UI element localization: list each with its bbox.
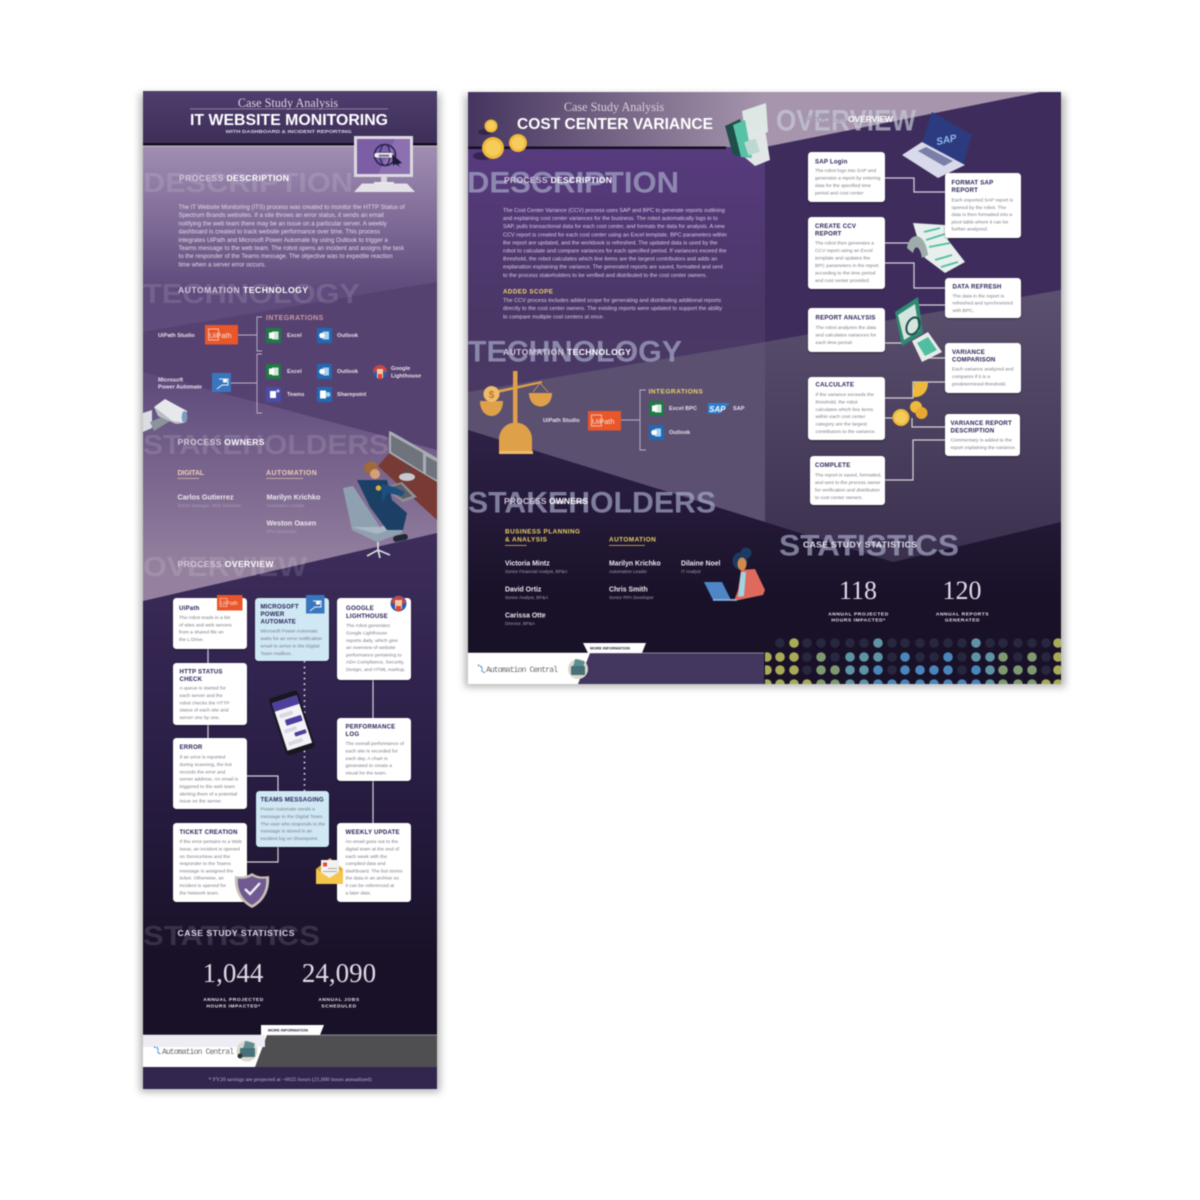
heading: process description: PROCESS DESCRIPTION — [504, 175, 612, 185]
diagram: integrations: UiPath Studio — [158, 333, 195, 339]
card: Performance log: each site is recorded for — [346, 748, 398, 754]
icon: Outlook — [317, 328, 332, 343]
team: business planning and analysis: Director, BP&A — [505, 621, 535, 626]
logo: Automation Central: Automation Central — [486, 666, 558, 675]
card: Error — [173, 738, 247, 809]
text block: description: Teams message to the web team. The robot opens an incident and assigns the task — [178, 245, 405, 252]
team: automation: IT Analyst — [681, 569, 701, 574]
card: Format SAP report: data is then formatted into a — [952, 212, 1012, 218]
statistic: reports generated — [936, 576, 989, 624]
card: Variance report description: VARIANCE REPORT — [950, 420, 1012, 427]
team: digital: Carlos Gutierrez — [178, 492, 234, 502]
card: HTTP status check: CHECK — [180, 676, 203, 683]
card: Google Lighthouse: Google Lighthouse — [346, 630, 387, 636]
card: SAP Login: The robot logs into SAP and — [815, 168, 876, 174]
heading: automation technology: TECHNOLOGY — [143, 278, 360, 309]
team: business planning and analysis — [505, 528, 580, 626]
diagram: integrations: INTEGRATIONS — [648, 388, 703, 396]
card: Ticket creation: message is assigned the — [180, 868, 234, 874]
text block: description: The IT Website Monitoring (ITS) process was created to monitor the HTTP Status of — [178, 204, 405, 211]
heading: case study statistics: STATISTICS — [779, 530, 959, 562]
statistic: reports generated: GENERATED — [945, 618, 980, 624]
text block: description: Spectrum Brands websites. If a site throws an error status, it sends an email — [178, 212, 384, 219]
card: Calculate: calculates which line items — [816, 407, 874, 413]
footer — [468, 643, 764, 684]
heading: process description: PROCESS DESCRIPTION — [179, 173, 289, 183]
icon: UiPath — [588, 411, 621, 430]
card: Ticket creation: TICKET CREATION — [180, 829, 238, 836]
card: HTTP status check — [173, 663, 247, 725]
diagram: integrations: Sharepoint — [337, 392, 366, 398]
icon: Excel — [266, 328, 281, 343]
card: Performance log: PERFORMANCE — [346, 724, 395, 730]
card: HTTP status check: server one by one. — [180, 715, 220, 721]
card: SAP Login: SAP Login — [815, 158, 848, 166]
text block: description: to the process stakeholders to be verified and distributed to the cost center owners. — [503, 273, 708, 279]
team: business planning and analysis: Senior Analyst, BP&A — [505, 595, 548, 600]
card: Error: If an error is reported — [180, 754, 225, 760]
card: Calculate: contributors to the variance. — [816, 429, 876, 435]
team: business planning and analysis: Carissa Otte — [505, 612, 546, 620]
card: Complete: and sent to the process owner — [815, 480, 881, 486]
diagram: integrations: Lighthouse — [391, 374, 421, 380]
card: UiPath: UiPath — [179, 605, 200, 612]
icon: coins — [892, 382, 928, 426]
text block: added scope: to compare multiple cost centers at once. — [503, 314, 605, 320]
heading: process overview: OVERVIEW — [776, 104, 917, 138]
heading: automation technology: AUTOMATION TECHNOLOGY — [503, 347, 631, 357]
icon: SAP — [708, 403, 730, 414]
diagram: integrations: Outlook — [669, 430, 691, 436]
diagram: integrations: SAP — [733, 406, 745, 412]
panel: Cost center variance — [465, 92, 1065, 689]
text block: description: robot to calculate and compare variances for each specified period. If variances exceed the — [503, 248, 727, 254]
card: Ticket creation: on ServiceNow and the — [180, 854, 230, 860]
text block: added scope — [503, 288, 722, 320]
connectors — [208, 649, 373, 862]
text block: description: and explaining cost center variances for the business. The robot automatically logs in to — [503, 216, 718, 222]
card: Calculate — [808, 377, 885, 440]
team: automation — [609, 536, 721, 600]
team: automation: Automation Leader — [266, 503, 305, 508]
card: Create CCV report: REPORT — [815, 230, 842, 238]
statistic: hours impacted: 1,044 — [203, 958, 264, 988]
icon: shield with check — [235, 873, 269, 908]
icon: Google Lighthouse badge — [390, 596, 406, 612]
card: Variance comparison: COMPARISON — [952, 356, 996, 364]
card: Variance comparison: compares if it is a — [952, 374, 990, 380]
icon: UiPath: UiPath — [209, 331, 232, 340]
statistic: reports generated: ANNUAL REPORTS — [936, 612, 989, 618]
icon: Outlook — [317, 364, 332, 379]
card: Teams messaging: message is stored in an — [260, 829, 312, 835]
diagram: integrations: Excel BPC — [669, 406, 697, 412]
card: Calculate: threshold, the robot — [816, 400, 858, 406]
illustration: woman with laptop — [704, 548, 765, 601]
team: automation: Senior RPA Developer — [609, 595, 654, 600]
heading: case study statistics: STATISTICS — [143, 920, 320, 951]
team: automation: Chris Smith — [609, 586, 648, 594]
heading: process description: DESCRIPTION — [143, 167, 353, 198]
icon: clipboard and magnifier — [895, 297, 942, 362]
diagram: integrations — [543, 388, 745, 450]
card: Create CCV report: CCV report using an Excel — [815, 248, 873, 254]
title: IT WEBSITE MONITORING — [190, 112, 388, 129]
team: automation — [266, 470, 321, 534]
icon: balance scale — [480, 371, 552, 454]
team: business planning and analysis: David Ortiz — [505, 586, 542, 594]
card: Calculate: within each cost center — [816, 414, 866, 420]
card: Data refresh: with BPC. — [952, 308, 974, 314]
icon: balance scale: $ — [489, 390, 495, 401]
card: Create CCV report: according to the time period — [815, 270, 876, 276]
heading: process owners: STAKEHOLDERS — [143, 429, 389, 460]
heading: process description: DESCRIPTION — [467, 166, 679, 200]
card: Create CCV report: CREATE CCV — [815, 223, 857, 230]
card: Error: ERROR — [180, 744, 203, 751]
text block: description: time when a server error occurs. — [178, 261, 266, 268]
card: Variance comparison: predetermined threshold. — [952, 382, 1006, 388]
heading: case study statistics: CASE STUDY STATISTICS — [803, 540, 917, 550]
card: Variance comparison: VARIANCE — [952, 349, 985, 356]
icon: envelope — [316, 858, 343, 884]
card: Google Lighthouse: LIGHTHOUSE — [346, 613, 388, 620]
text block: description: SAP, pulls transactional data for each cost center, and formats the data for analysis. A new — [503, 224, 726, 230]
panel: IT website monitoring — [140, 91, 440, 1092]
statistic: hours impacted: ANNUAL PROJECTED — [828, 612, 889, 618]
card: Weekly update: it can be referenced at — [346, 883, 395, 889]
statistic: hours impacted: 118 — [839, 576, 877, 605]
statistic: jobs scheduled: 24,090 — [302, 958, 376, 988]
text block: description: threshold, the robot calculates which line items are the largest contributors and adds an — [503, 257, 717, 263]
card: Format SAP report: REPORT — [952, 187, 978, 194]
card: Microsoft Power Automate: POWER — [260, 611, 285, 618]
card: Google Lighthouse: The robot generates — [346, 623, 391, 629]
heading: case study statistics: CASE STUDY STATISTICS — [178, 928, 295, 938]
icon: SAP: SAP — [709, 405, 726, 414]
card: Microsoft Power Automate: waits for an error notification — [260, 636, 322, 642]
diagram: integrations: INTEGRATIONS — [266, 315, 324, 322]
more information tab: MORE INFORMATION — [268, 1028, 308, 1032]
card: Complete: to cost center owners. — [815, 495, 863, 501]
team: digital: Senior Manager, Web Solutions — [178, 503, 241, 508]
card: Google Lighthouse: ADA Compliance, Security, — [346, 660, 404, 666]
text block: added scope: The CCV process includes added scope for generating and distributing additional reports — [503, 298, 721, 304]
icon: monitor with www — [354, 136, 415, 192]
team: business planning and analysis: BUSINESS PLANNING — [505, 528, 580, 536]
card: Weekly update: compiled data and — [346, 861, 386, 867]
icon: Excel — [649, 401, 664, 416]
card: HTTP status check: A queue is started for — [180, 686, 226, 692]
card: Microsoft Power Automate: AUTOMATE — [260, 618, 296, 626]
statistic: hours impacted: ANNUAL PROJECTED — [203, 997, 264, 1003]
card: Variance report description — [945, 414, 1020, 456]
text block: description — [178, 204, 405, 268]
card: Calculate: If the variance exceeds the — [816, 392, 874, 398]
diagram: integrations: Outlook — [337, 333, 359, 339]
card: Error: during scanning, the bot — [180, 762, 232, 768]
card: Error: alerting them of a potential — [180, 791, 237, 797]
statistic: jobs scheduled: ANNUAL JOBS — [318, 997, 360, 1003]
card: UiPath: the L:Drive. — [179, 637, 204, 643]
card: Create CCV report: The robot then generates a — [815, 240, 874, 246]
card: UiPath: The robot reads in a list — [179, 615, 231, 621]
diagram: integrations: Outlook — [337, 369, 359, 375]
heading: automation technology: TECHNOLOGY — [468, 336, 682, 368]
icon: SAP laptop — [902, 112, 972, 178]
card: Format SAP report: opened by the robot. The — [952, 205, 1006, 211]
card: Weekly update: dashboard. The bot stores — [346, 868, 403, 874]
card: Weekly update: WEEKLY UPDATE — [346, 829, 400, 836]
title: WITH DASHBOARD & INCIDENT REPORTING — [226, 129, 352, 134]
card: Google Lighthouse: performance pertaining to — [346, 652, 402, 658]
footnote: * FY20 savings are projected at ~6025 hours (21,000 hours annualized) — [208, 1076, 372, 1083]
team: automation: AUTOMATION — [609, 536, 656, 544]
card: Error: server address. An email is — [180, 777, 239, 783]
card: Complete: COMPLETE — [815, 462, 850, 469]
text block: description: notifying the web team there may be an issue on a particular server. A weekly — [178, 220, 388, 227]
icon: Outlook — [649, 425, 664, 440]
card: Data refresh: refreshed and synchronized — [952, 300, 1013, 306]
card: Variance report description: Commentary is added to the — [950, 438, 1012, 444]
team: automation: Marilyn Krichko — [609, 560, 661, 568]
diagram: integrations: Excel — [287, 333, 302, 339]
heading: process overview: PROCESS OVERVIEW — [178, 559, 274, 569]
team: automation: AUTOMATION — [266, 470, 317, 477]
card: Ticket creation: incident is opened for — [180, 883, 226, 889]
team: digital — [178, 470, 241, 508]
diagram: integrations: Google — [391, 366, 410, 372]
icon: SAP laptop: SAP — [935, 133, 958, 148]
card: Variance comparison: Each variance analyzed and — [952, 366, 1014, 372]
heading: process owners: PROCESS OWNERS — [504, 496, 588, 506]
card: Ticket creation — [173, 823, 247, 902]
card: Format SAP report: further analyzed. — [952, 226, 988, 232]
card: SAP Login: generates a report by entering — [815, 176, 881, 182]
card: Complete: The report is saved, formatted, — [815, 472, 882, 478]
card: Report analysis: REPORT ANALYSIS — [816, 314, 876, 322]
team: automation: Marilyn Krichko — [266, 492, 321, 502]
card: Performance log: each day. A chart is — [346, 756, 388, 762]
card: SAP Login: period and cost center — [815, 190, 864, 196]
more information tab — [261, 1025, 324, 1035]
title — [517, 100, 713, 133]
card: Error: records the error and — [180, 769, 225, 775]
diagram: integrations: Microsoft — [158, 378, 183, 384]
statistic: hours impacted: HOURS IMPACTED* — [206, 1004, 261, 1010]
card: Ticket creation: If the error pertains to a Web — [180, 839, 242, 845]
icon: Sharepoint — [317, 387, 332, 402]
card: Variance report description: DESCRIPTION — [950, 428, 994, 434]
card: Calculate: CALCULATE — [816, 382, 854, 388]
icon: Google Lighthouse — [373, 365, 387, 379]
card: Report analysis: each time period. — [816, 340, 853, 346]
card: Ticket creation: the Network team. — [180, 890, 219, 896]
connectors — [885, 178, 945, 480]
card: HTTP status check: HTTP STATUS — [180, 668, 223, 676]
card: Teams messaging — [256, 791, 329, 847]
card: SAP Login: data for the specified time — [815, 183, 871, 189]
card: Report analysis: The robot analyzes the data — [816, 325, 876, 331]
text block: description: CCV report is created for each cost center using an Excel template. BPC parameters within — [503, 232, 727, 238]
card: Performance log — [337, 718, 411, 781]
card: Format SAP report: FORMAT SAP — [952, 180, 993, 186]
card: Performance log: generated to create a — [346, 763, 392, 769]
card: Format SAP report — [945, 173, 1021, 238]
card: Microsoft Power Automate: MICROSOFT — [260, 604, 299, 610]
card: Microsoft Power Automate — [255, 595, 329, 661]
more information tab: MORE INFORMATION — [590, 646, 630, 650]
diagram: integrations: Excel — [287, 369, 302, 375]
text block: description — [503, 208, 727, 279]
card: Create CCV report: template and updates the — [815, 256, 870, 262]
footer — [143, 1025, 437, 1089]
card: Error: triggered to the web team — [180, 784, 235, 790]
text block: description: to the responder of the Teams message. The objective was to expedite reaction — [178, 253, 393, 260]
text block: description: The Cost Center Variance (CCV) process uses SAP and BPC to generate reports outlining — [503, 208, 725, 214]
card: Create CCV report: BPC parameters in the report — [815, 263, 879, 269]
card: Performance log: The overall performance of — [346, 741, 405, 747]
team: business planning and analysis: Victoria Mintz — [505, 560, 550, 568]
diagram: integrations — [158, 315, 421, 413]
card: HTTP status check: robot checks the HTTP — [180, 700, 230, 706]
card: Calculate: category are the largest — [816, 422, 868, 428]
icon: curled report — [907, 223, 965, 273]
card: UiPath — [173, 595, 247, 649]
card: Google Lighthouse: reports daily, which give — [346, 638, 398, 644]
card: Weekly update — [337, 823, 411, 902]
icon: monitor with www: www — [378, 153, 390, 158]
card: Error: issue on the server. — [180, 799, 222, 805]
diagram: integrations: UiPath Studio — [543, 418, 580, 424]
card: HTTP status check: status of each site and — [180, 708, 229, 714]
title: Case Study Analysis — [564, 100, 664, 114]
card: Performance log: visual for the team. — [346, 770, 387, 776]
card: Weekly update: the data in an archive so — [346, 876, 399, 882]
icon: security camera — [143, 399, 187, 432]
illustration: operator at monitors — [343, 431, 437, 558]
card: Create CCV report — [808, 217, 885, 289]
card: Weekly update: digital team at the end of — [346, 846, 400, 852]
card: Performance log: LOG — [346, 731, 359, 738]
heading: automation technology: AUTOMATION TECHNOLOGY — [178, 285, 308, 295]
heading: process owners: STAKEHOLDERS — [468, 486, 716, 520]
text block: description: integrates UiPath and Microsoft Power Automate by using Outlook to trigger a — [178, 237, 388, 244]
card: Google Lighthouse: Design, and HTML markup. — [346, 667, 406, 673]
title — [190, 96, 388, 134]
card: Ticket creation: issue, an incident is opened — [180, 846, 240, 852]
card: HTTP status check: each server and the — [180, 693, 223, 699]
logo: Automation Central: Automation Central — [162, 1048, 234, 1057]
statistic: hours impacted — [203, 958, 264, 1010]
icon: Power Automate — [212, 373, 231, 392]
card: Teams messaging: message to the Digital Team. — [260, 814, 323, 820]
team: digital: DIGITAL — [178, 470, 205, 477]
icon: reports stack — [725, 103, 770, 166]
card: SAP Login — [808, 152, 885, 202]
icon: Teams — [266, 387, 281, 402]
icon: Power Automate badge — [306, 595, 324, 614]
card: Google Lighthouse — [337, 596, 411, 680]
team: automation: Dilaine Noel — [681, 560, 721, 568]
card: Report analysis — [808, 308, 885, 352]
title: COST CENTER VARIANCE — [517, 116, 713, 133]
icon: Excel — [266, 364, 281, 379]
statistic: jobs scheduled: SCHEDULED — [321, 1004, 357, 1010]
card: Variance comparison — [945, 343, 1021, 393]
card: Ticket creation: responder to the Teams — [180, 861, 231, 867]
heading: process overview: OVERVIEW — [143, 551, 308, 582]
statistic: hours impacted — [828, 576, 889, 624]
card: Report analysis: and calculates variances for — [816, 332, 876, 338]
card: Google Lighthouse: an overview of website — [346, 645, 396, 651]
card: Weekly update: An email goes out to the — [346, 839, 399, 845]
icon: UiPath — [205, 325, 238, 344]
text block: added scope: ADDED SCOPE — [503, 288, 553, 296]
card: Data refresh — [945, 278, 1021, 318]
card: Microsoft Power Automate: email to arrive in the Digital — [260, 643, 319, 649]
team: automation: Weston Oasen — [266, 518, 316, 528]
dot pattern — [762, 638, 1063, 689]
icon: robot — [568, 659, 588, 679]
card: Weekly update: a later date. — [346, 890, 371, 896]
heading: process overview: PROCESS OVERVIEW — [805, 114, 894, 124]
text block: description: explanation explaining the variance. The generated reports are saved, formatted and sent — [503, 265, 723, 271]
card: Teams messaging: TEAMS MESSAGING — [260, 796, 324, 804]
card: Create CCV report: and cost center provided. — [815, 278, 870, 284]
statistic: reports generated: 120 — [942, 576, 982, 605]
icon: smartphone — [268, 690, 316, 756]
title: Case Study Analysis — [238, 96, 338, 110]
card: UiPath: from a shared file on — [179, 630, 224, 636]
icon: UiPath: UiPath — [592, 417, 615, 426]
icon: robot — [236, 1040, 258, 1062]
card: Format SAP report: Each exported SAP report is — [952, 198, 1014, 204]
card: Variance report description: report explaining the variance. — [950, 445, 1016, 451]
card: Complete — [810, 456, 885, 505]
text block: added scope: directly to the cost center owners. The existing reports were updated to support the ability — [503, 306, 722, 312]
card: Data refresh: DATA REFRESH — [952, 284, 1002, 290]
more information tab — [583, 643, 646, 653]
team: business planning and analysis: Senior Financial Analyst, BP&A — [505, 569, 568, 574]
diagram: integrations: Teams — [287, 392, 304, 398]
card: Teams messaging: Power Automate sends a — [260, 806, 315, 812]
team: business planning and analysis: & ANALYSIS — [505, 536, 548, 544]
team: automation: RPA Developer — [266, 529, 297, 534]
card: Teams messaging: The user who responds to the — [260, 821, 325, 827]
card: Teams messaging: incident log on Sharepoint. — [260, 836, 318, 842]
card: Complete: for verification and distribution — [815, 488, 880, 494]
card: Data refresh: The data in the report is — [952, 294, 1005, 300]
card: Ticket creation: ticket. Otherwise, an — [180, 876, 224, 882]
text block: description: the report are updated, and the workbook is refreshed. The updated data is used by the — [503, 240, 718, 246]
card: Google Lighthouse: GOOGLE — [346, 605, 374, 612]
card: Microsoft Power Automate: Microsoft Power Automate — [260, 628, 318, 634]
icon: UiPath badge: UiPath — [220, 601, 238, 607]
statistic: jobs scheduled — [302, 958, 376, 1010]
card: Format SAP report: pivot table where it can be — [952, 220, 1009, 226]
card: Weekly update: each week with the — [346, 854, 387, 860]
card: Microsoft Power Automate: Team mailbox. — [260, 651, 292, 657]
team: automation: Automation Leader — [609, 569, 648, 574]
card: UiPath: of sites and web servers — [179, 622, 232, 628]
heading: process owners: PROCESS OWNERS — [178, 437, 265, 447]
text block: description: dashboard is created to track website performance over time. This process — [178, 229, 380, 236]
statistic: hours impacted: HOURS IMPACTED* — [831, 618, 886, 624]
diagram: integrations: Power Automate — [158, 384, 202, 390]
icon: gold coins — [473, 120, 527, 160]
